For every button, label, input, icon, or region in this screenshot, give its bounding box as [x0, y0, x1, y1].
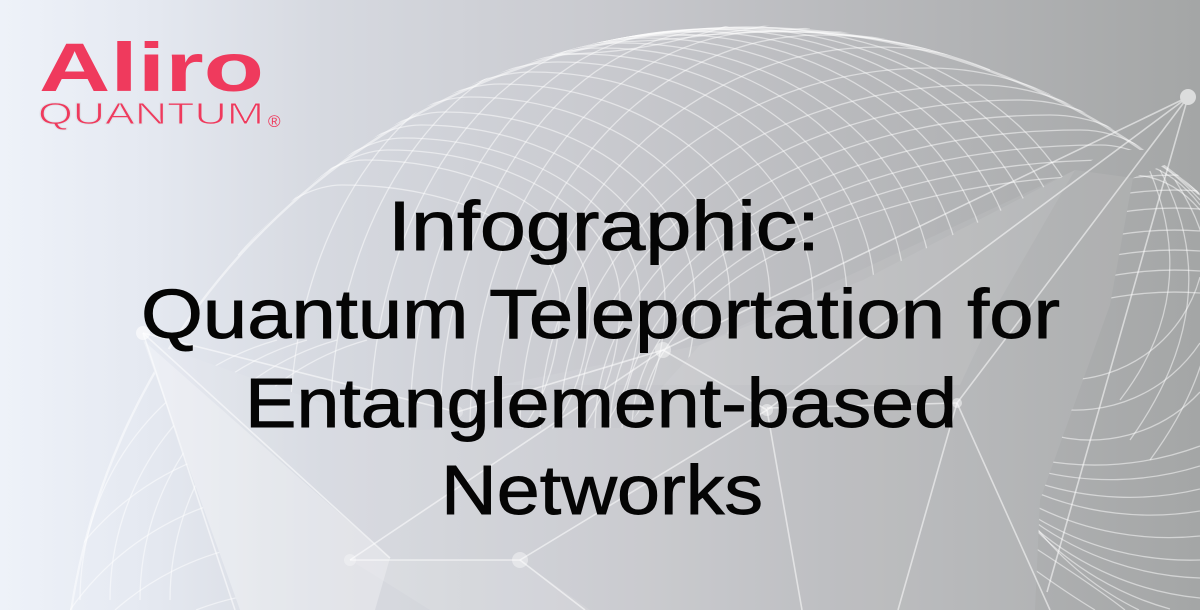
lower-left globe arcs	[50, 340, 367, 610]
registered mark: ®	[268, 112, 281, 131]
logo: Aliro Quantum	[38, 29, 281, 131]
network lines	[143, 97, 1188, 610]
title line 1: Infographic:	[388, 187, 820, 265]
globe parallel arcs	[290, 25, 1200, 430]
title	[141, 187, 1060, 529]
logo wordmark QUANTUM: QUANTUM	[38, 96, 264, 131]
globe meridian arcs	[192, 27, 1100, 432]
network nodes	[136, 89, 1196, 568]
logo wordmark Aliro: Aliro	[39, 29, 264, 106]
title line 2: Quantum Teleportation for	[141, 275, 1060, 353]
lighter facets of the network shape	[143, 170, 1133, 610]
title line 3: Entanglement-based	[245, 364, 957, 442]
title line 4: Networks	[441, 451, 763, 529]
right-side globe arcs	[1035, 160, 1200, 610]
